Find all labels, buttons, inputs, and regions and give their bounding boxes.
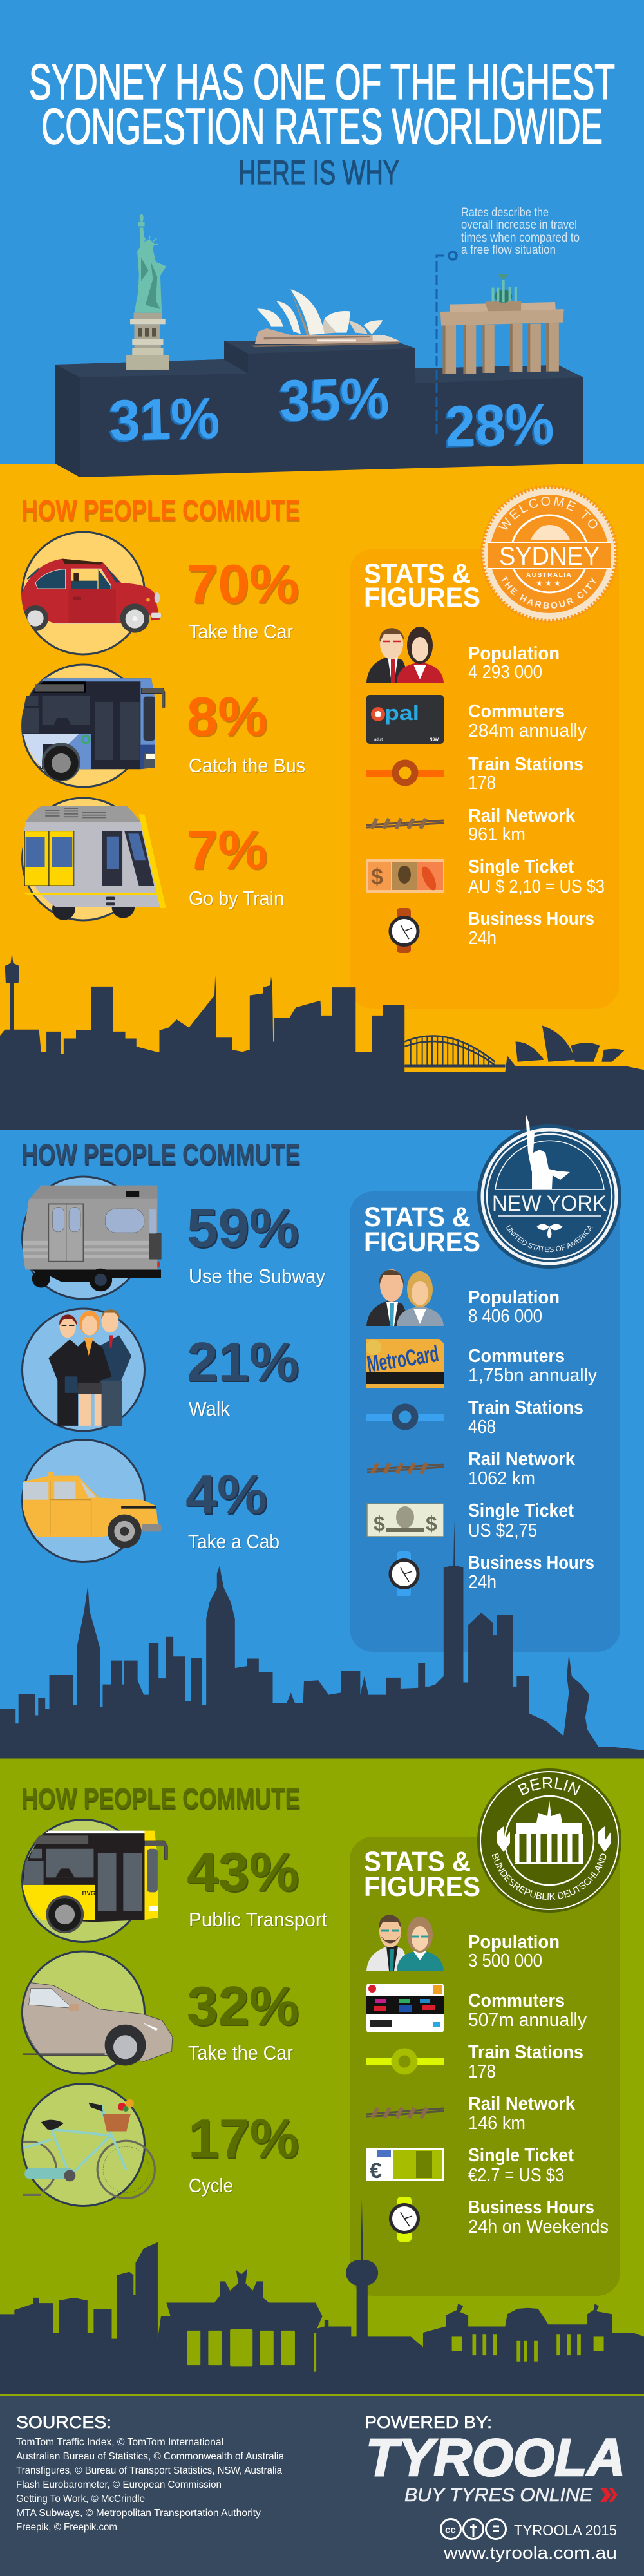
copyright: TYROOLA 2015 <box>514 2522 617 2539</box>
stat row: population (sydney): Population <box>468 643 560 664</box>
badge: berlin: BERLIN <box>518 1777 581 1795</box>
stat row: population (sydney) <box>366 627 560 683</box>
stat row: single ticket (new york) <box>367 1501 574 1541</box>
stat row: population (new york) <box>366 1269 560 1327</box>
stat row: rail network (new york): 1062 km <box>468 1468 535 1489</box>
stat row: rail network (berlin): Rail Network <box>468 2094 576 2114</box>
stat row: population (sydney): 4 293 000 <box>468 662 542 683</box>
stat: 4% take a cab <box>185 1464 279 1553</box>
stat: 32% take the car: Take the Car <box>188 2041 293 2064</box>
footer: powered by tyroola: POWERED BY: <box>365 2412 492 2432</box>
stat: 43% public transport <box>187 1842 327 1931</box>
footer: sources: MTA Subways, © Metropolitan Transportation Authority <box>16 2508 261 2519</box>
stat row: single ticket (sydney): Single Ticket <box>468 857 574 877</box>
tagline: buy tyres online: BUY TYRES ONLINE <box>404 2485 593 2506</box>
stat row: population (berlin) <box>366 1915 560 1971</box>
icon: walking commuters <box>22 1309 144 1431</box>
SYDNEY section <box>0 485 644 1130</box>
icon: statue of liberty <box>126 214 169 370</box>
icon: yellow cab <box>22 1440 162 1562</box>
stat: 21% walk: 21% <box>187 1332 299 1393</box>
footer: sources: TomTom Traffic Index, © TomTom International <box>16 2437 223 2448</box>
badge: berlin <box>477 1768 621 1913</box>
stat: 59% use the subway: Use the Subway <box>189 1265 325 1287</box>
stat row: rail network (sydney): 961 km <box>468 824 526 845</box>
stat row: commuters (sydney) <box>366 695 587 744</box>
heading: stats and figures (new york) <box>364 1202 480 1258</box>
BERLIN section <box>0 1768 644 2394</box>
podium <box>55 341 583 477</box>
heading: stats and figures (sydney) <box>364 558 480 613</box>
badge: welcome to sydney: ★ ★ ★ <box>536 579 561 588</box>
footer: sources: Australian Bureau of Statistics, © Commonwealth of Australia <box>16 2451 284 2462</box>
stat row: population (new york): 8 406 000 <box>468 1306 542 1327</box>
stat row: business hours (berlin) <box>389 2197 609 2242</box>
stat row: commuters (sydney): Commuters <box>468 701 565 722</box>
panel: new york stats background <box>350 1191 620 1652</box>
note: rates explanation <box>461 206 580 257</box>
stat: 32% take the car <box>187 1976 299 2064</box>
stat row: rail network (new york): Rail Network <box>468 1449 576 1470</box>
stat row: train stations (berlin): Train Stations <box>468 2042 583 2063</box>
stat row: business hours (new york): Business Hours <box>468 1553 594 1573</box>
heading: stats and figures (sydney): FIGURES <box>364 582 480 613</box>
footer: sources <box>16 2412 284 2533</box>
stat row: single ticket (berlin): €2.7 = US $3 <box>468 2165 564 2186</box>
skyline: sydney <box>0 952 644 1130</box>
icon: subway car <box>22 1177 162 1299</box>
stat row: business hours (berlin): 24h on Weekends <box>468 2217 609 2237</box>
stat row: rail network (sydney) <box>366 806 576 845</box>
note: rates explanation: Rates describe the <box>461 206 549 220</box>
stat row: commuters (new york): MetroCard <box>365 1340 440 1378</box>
heading: stats and figures (sydney): STATS & <box>364 558 471 589</box>
stat: 8% catch the bus: 8% <box>187 687 267 748</box>
stat row: rail network (sydney): Rail Network <box>468 806 576 826</box>
icon: blue bus <box>22 665 165 787</box>
badge: welcome to sydney <box>480 485 618 623</box>
stat row: train stations (sydney): 178 <box>468 773 496 793</box>
skyline: new york <box>0 1520 644 1758</box>
icon: silver car <box>22 1951 173 2074</box>
badge: berlin: BUNDESREPUBLIK DEUTSCHLAND <box>492 1853 607 1900</box>
stat row: business hours (sydney): 24h <box>468 928 497 949</box>
stat row: single ticket (new york): US $2,75 <box>468 1520 537 1541</box>
icon: creative commons <box>440 2519 506 2539</box>
stat row: commuters (new york): Commuters <box>468 1346 565 1367</box>
stat row: business hours (new york) <box>389 1551 594 1596</box>
stat: 32% take the car: 32% <box>187 1976 299 2037</box>
stat row: single ticket (new york): $ <box>426 1512 437 1535</box>
strip: new york statue base remnant <box>598 1745 644 1747</box>
badge: new york <box>477 1113 621 1269</box>
podium stat: 31%: 31% <box>109 386 220 453</box>
stat: 7% go by train <box>187 820 284 909</box>
stat row: commuters (sydney): NSW <box>430 738 439 742</box>
stat row: rail network (berlin): 146 km <box>468 2113 526 2134</box>
badge: new york: UNITED STATES OF AMERICA <box>506 1225 593 1252</box>
icon: red chevrons <box>600 2488 618 2502</box>
stat row: commuters (berlin): 507m annually <box>468 2010 587 2031</box>
footer: sources: Getting To Work, © McCrindle <box>16 2494 145 2505</box>
stat row: single ticket (sydney): AU $ 2,10 = US $3 <box>468 876 605 897</box>
icon: bicycle <box>22 2084 155 2206</box>
heading: stats and figures (berlin) <box>364 1846 480 1902</box>
heading: stats and figures (new york): FIGURES <box>364 1227 480 1258</box>
stat: 17% cycle: 17% <box>188 2108 299 2170</box>
stat: 59% use the subway <box>187 1198 325 1287</box>
stat row: single ticket (new york): $ <box>374 1512 385 1535</box>
stat: 70% take the car: 70% <box>187 554 299 615</box>
stat row: commuters (berlin) <box>366 1984 587 2032</box>
logo: tyroola: TYROOLA <box>366 2429 625 2487</box>
stat row: commuters (sydney): adult <box>374 738 383 742</box>
icon: sydney opera house <box>251 289 400 347</box>
stat row: business hours (new york): 24h <box>468 1572 497 1593</box>
stat row: commuters (sydney): 284m annually <box>468 721 587 741</box>
stat row: population (new york): Population <box>468 1287 560 1308</box>
stat: 17% cycle <box>188 2108 299 2197</box>
icon: yellow berlin bus: BVG <box>82 1890 95 1897</box>
heading: stats and figures (berlin): FIGURES <box>364 1871 480 1902</box>
stat row: single ticket (sydney) <box>366 857 605 897</box>
stat: 8% catch the bus <box>187 687 305 777</box>
badge: welcome to sydney: WELCOME TO <box>498 497 598 530</box>
NEW YORK section <box>0 1113 644 1758</box>
podium stat: 35%: 35% <box>279 366 390 433</box>
stat row: train stations (berlin): 178 <box>468 2061 496 2082</box>
stat row: single ticket (sydney): $ <box>371 865 383 889</box>
dashed leader line <box>437 252 457 434</box>
stat row: population (berlin): 3 500 000 <box>468 1951 542 1971</box>
stat row: commuters (new york): 1,75bn annually <box>468 1365 597 1386</box>
heading: stats and figures (berlin): STATS & <box>364 1846 471 1877</box>
website: www.tyroola.com.au <box>443 2543 617 2562</box>
stat: 59% use the subway: 59% <box>187 1198 299 1259</box>
icon: brandenburg gate <box>440 274 564 374</box>
stat row: business hours (berlin): Business Hours <box>468 2197 594 2218</box>
footer: sources: Flash Eurobarometer, © European Commission <box>16 2479 222 2490</box>
stat: 17% cycle: Cycle <box>189 2174 233 2197</box>
stat row: train stations (sydney): Train Stations <box>468 754 583 775</box>
stat row: train stations (berlin) <box>366 2042 583 2082</box>
stat row: rail network (berlin) <box>366 2094 576 2134</box>
heading: how people commute (sydney): HOW PEOPLE COMMUTE <box>21 494 300 527</box>
note: rates explanation: overall increase in travel <box>461 218 577 232</box>
footer: sources: Freepik, © Freepik.com <box>16 2522 117 2533</box>
stat row: commuters (sydney): pal <box>384 701 419 724</box>
stat: 70% take the car <box>187 554 299 643</box>
stat row: population (berlin): Population <box>468 1932 560 1953</box>
heading: how people commute (berlin): HOW PEOPLE COMMUTE <box>21 1782 300 1815</box>
stat: 43% public transport: Public Transport <box>189 1908 327 1931</box>
stat row: business hours (sydney) <box>389 908 594 953</box>
stat row: commuters (berlin): Commuters <box>468 1991 565 2011</box>
badge: welcome to sydney: THE HARBOUR CITY <box>501 576 596 609</box>
icon: yellow berlin bus <box>22 1820 167 1942</box>
stat row: business hours (sydney): Business Hours <box>468 909 594 929</box>
stat row: single ticket (berlin) <box>366 2145 574 2186</box>
stat row: commuters (new york) <box>365 1339 597 1388</box>
footer: powered by tyroola <box>365 2412 625 2562</box>
title <box>29 53 615 155</box>
stat: 21% walk <box>187 1332 299 1420</box>
note: rates explanation: times when compared to <box>461 231 580 245</box>
stat: 7% go by train: Go by Train <box>189 887 284 909</box>
heading: stats and figures (new york): STATS & <box>364 1202 471 1233</box>
stat: 4% take a cab: Take a Cab <box>188 1530 279 1553</box>
stat row: single ticket (berlin): Single Ticket <box>468 2145 574 2166</box>
footer: sources: Transfigures, © Bureau of Transport Statistics, NSW, Australia <box>16 2465 282 2476</box>
stat: 7% go by train: 7% <box>187 820 267 881</box>
badge: welcome to sydney: AUSTRALIA <box>526 572 572 579</box>
panel: berlin stats background <box>350 1837 620 2296</box>
heading: how people commute (new york): HOW PEOPLE COMMUTE <box>21 1138 300 1171</box>
badge: welcome to sydney: SYDNEY <box>499 542 600 571</box>
footer: sources: SOURCES: <box>16 2412 111 2432</box>
stat: 21% walk: Walk <box>189 1397 230 1420</box>
skyline: berlin <box>0 2199 644 2394</box>
stat: 8% catch the bus: Catch the Bus <box>189 754 305 777</box>
icon: sydney train <box>22 798 166 920</box>
stat: 4% take a cab: 4% <box>185 1464 267 1526</box>
stat: 70% take the car: Take the Car <box>189 620 293 643</box>
icon: creative commons: cc <box>445 2524 456 2535</box>
stat row: single ticket (berlin): € <box>370 2159 382 2183</box>
podium stat: 28%: 28% <box>444 392 554 459</box>
stat row: rail network (new york) <box>367 1449 576 1489</box>
panel: sydney stats background <box>350 549 619 1009</box>
icon: red car <box>21 532 161 654</box>
stat row: train stations (new york): Train Stations <box>468 1397 583 1418</box>
stat row: single ticket (new york): Single Ticket <box>468 1501 574 1521</box>
subtitle: HERE IS WHY <box>238 154 399 192</box>
stat row: train stations (new york) <box>366 1397 583 1437</box>
note: rates explanation: a free flow situation <box>461 243 556 257</box>
stat row: train stations (sydney) <box>366 754 583 793</box>
badge: new york: NEW YORK <box>492 1191 607 1216</box>
stat: 43% public transport: 43% <box>187 1842 299 1903</box>
stat row: train stations (new york): 468 <box>468 1417 496 1437</box>
